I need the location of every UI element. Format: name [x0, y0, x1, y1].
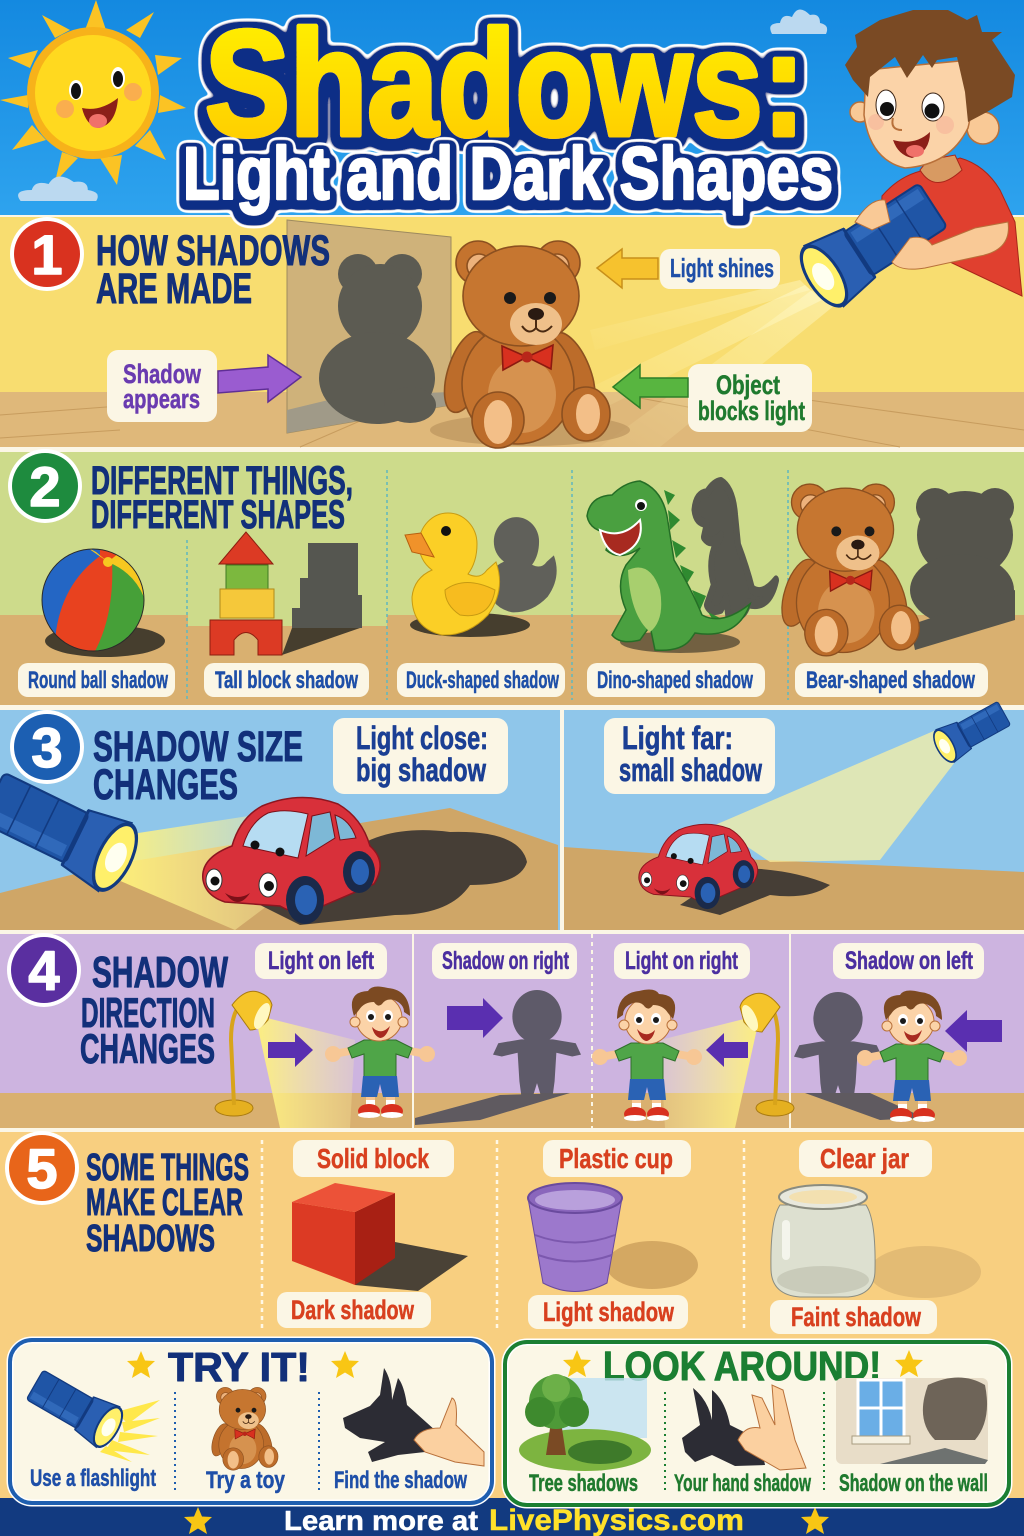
- panel 3: shadow size changes: [0, 697, 1013, 930]
- ball with shadow: [42, 548, 165, 657]
- solid block: [292, 1183, 468, 1291]
- badge 2: 2: [29, 455, 61, 518]
- badge 3: 3: [31, 716, 63, 779]
- heading 5: SOME THINGS: [86, 1147, 249, 1189]
- left beam: [118, 815, 295, 930]
- heading 3: SHADOW SIZE: [93, 723, 303, 771]
- hand shadow rabbit: [682, 1385, 806, 1470]
- footer bar: Learn more at: [284, 1505, 478, 1536]
- wall shadow scene: [836, 1378, 988, 1464]
- callout: object blocks light: Object: [716, 370, 780, 400]
- callout: shadow appears: Shadow: [123, 359, 202, 389]
- clouds: [18, 9, 827, 201]
- heading 2: DIFFERENT THINGS,: [91, 459, 353, 503]
- flashlight far: [928, 697, 1013, 767]
- heading 3: [93, 723, 303, 809]
- far beam: [715, 730, 955, 862]
- title: Shadows:: [205, 0, 805, 167]
- heading 4: CHANGES: [80, 1025, 215, 1072]
- try it captions: Find the shadow: [334, 1467, 467, 1494]
- callout: light shines: Light shines: [670, 253, 774, 283]
- heading 2: DIFFERENT SHAPES: [91, 493, 345, 537]
- header: sun: [0, 0, 186, 185]
- lamp left: [215, 991, 273, 1116]
- wall shadows: [415, 990, 925, 1125]
- flashlight close: [0, 763, 148, 899]
- callout: light shines: [660, 249, 780, 289]
- panel 1: how shadows are made: [10, 217, 835, 448]
- small car: [639, 824, 758, 909]
- heading badge 1: [10, 217, 84, 291]
- small car shadow: [680, 868, 830, 915]
- big car shadow: [260, 830, 527, 925]
- direction arrows: [268, 998, 1002, 1067]
- object labels: Light shadow: [543, 1297, 675, 1327]
- badge 4: [7, 933, 81, 1007]
- callout: object blocks light: [688, 364, 812, 432]
- duck with shadow: [405, 513, 557, 637]
- panel 4: shadow direction changes: [7, 933, 1002, 1128]
- callout: light close: [333, 718, 508, 794]
- callout: shadow appears: appears: [123, 384, 200, 414]
- heading 3: CHANGES: [93, 761, 238, 809]
- direction labels: Light on left: [268, 947, 374, 975]
- bear with shadow: [775, 484, 1015, 656]
- object labels: Clear jar: [820, 1143, 909, 1174]
- hand shadow dog: [343, 1368, 484, 1466]
- look around heading: LOOK AROUND!: [603, 1343, 881, 1389]
- direction labels: Shadow on right: [442, 947, 569, 975]
- look around dividers: [665, 1392, 824, 1494]
- arrow: light shines: [597, 249, 658, 288]
- try it dividers: [175, 1392, 319, 1490]
- plastic cup: [528, 1183, 698, 1292]
- heading 4: DIRECTION: [81, 989, 215, 1036]
- try it heading: [127, 1344, 359, 1390]
- object labels: Plastic cup: [559, 1143, 673, 1174]
- look around captions: Your hand shadow: [674, 1470, 811, 1497]
- badge 4: 4: [28, 939, 60, 1002]
- heading 1: ARE MADE: [96, 265, 252, 313]
- heading badge 1: 1: [31, 223, 63, 286]
- object labels: Dark shadow: [291, 1295, 415, 1325]
- heading 4: SHADOW: [92, 948, 228, 997]
- object labels: Faint shadow: [791, 1302, 922, 1332]
- object labels: [277, 1140, 937, 1334]
- try it captions: Use a flashlight: [30, 1465, 156, 1492]
- panel 5: some things make clear shadows: [5, 1131, 981, 1334]
- big car: [203, 797, 380, 924]
- badge 5: 5: [26, 1137, 58, 1200]
- callout: shadow appears: [107, 350, 217, 422]
- try it heading: TRY IT!: [168, 1344, 310, 1390]
- label row: Dino-shaped shadow: [597, 667, 753, 694]
- dashed dividers: [262, 1140, 744, 1328]
- look around box: [505, 1342, 1009, 1505]
- tree scene: [519, 1374, 651, 1471]
- block tower with shadow: [210, 532, 362, 655]
- heading 5: SHADOWS: [86, 1218, 215, 1260]
- teddy bear: [430, 241, 630, 448]
- callout: light far: [604, 718, 775, 794]
- panel 2: different things, different shapes: [8, 449, 1015, 700]
- flashlight with rays: [23, 1364, 160, 1462]
- footer bar: [0, 1498, 1024, 1536]
- heading 5: MAKE CLEAR: [86, 1182, 243, 1224]
- direction labels: [255, 943, 984, 979]
- badge 2: [8, 449, 82, 523]
- arrow: object blocks light: [613, 365, 688, 408]
- light cones: [255, 1015, 760, 1128]
- column dividers: [187, 470, 788, 700]
- light rays: [585, 280, 835, 447]
- kids: [325, 987, 967, 1122]
- try it captions: [30, 1465, 467, 1494]
- screen with bear shadow: [287, 220, 451, 433]
- callout: object blocks light: blocks light: [698, 396, 805, 426]
- panel dividers: [413, 934, 790, 1128]
- label row: [18, 663, 988, 697]
- label row: Duck-shaped shadow: [406, 667, 559, 694]
- callout: light close: big shadow: [356, 752, 486, 788]
- callout: light far: Light far:: [622, 720, 733, 756]
- title: Light and Dark Shapes: [183, 132, 833, 215]
- look around captions: [529, 1470, 988, 1497]
- dinosaur with shadow: [587, 481, 776, 653]
- arrow: shadow appears: [218, 355, 301, 402]
- heading 1: HOW SHADOWS: [96, 227, 330, 275]
- title: [183, 0, 833, 215]
- heading 5: [86, 1147, 249, 1260]
- badge 3: [10, 710, 84, 784]
- try it captions: Try a toy: [206, 1467, 286, 1494]
- callout: light far: small shadow: [619, 752, 762, 788]
- heading 1: [96, 227, 330, 313]
- boy with flashlight: [790, 10, 1022, 315]
- heading 2: [91, 459, 353, 537]
- badge 5: [5, 1131, 79, 1205]
- label row: Round ball shadow: [28, 667, 168, 694]
- object labels: Solid block: [317, 1143, 429, 1174]
- label row: Tall block shadow: [215, 667, 358, 694]
- callout: light close: Light close:: [356, 720, 488, 756]
- lamp right: [739, 993, 794, 1116]
- heading 4: [80, 948, 228, 1072]
- clear jar: [771, 1185, 981, 1298]
- direction labels: Light on right: [625, 947, 738, 975]
- toy bear: [208, 1387, 278, 1470]
- look around captions: Tree shadows: [529, 1470, 638, 1497]
- try it box: [10, 1340, 492, 1503]
- direction labels: Shadow on left: [845, 947, 973, 975]
